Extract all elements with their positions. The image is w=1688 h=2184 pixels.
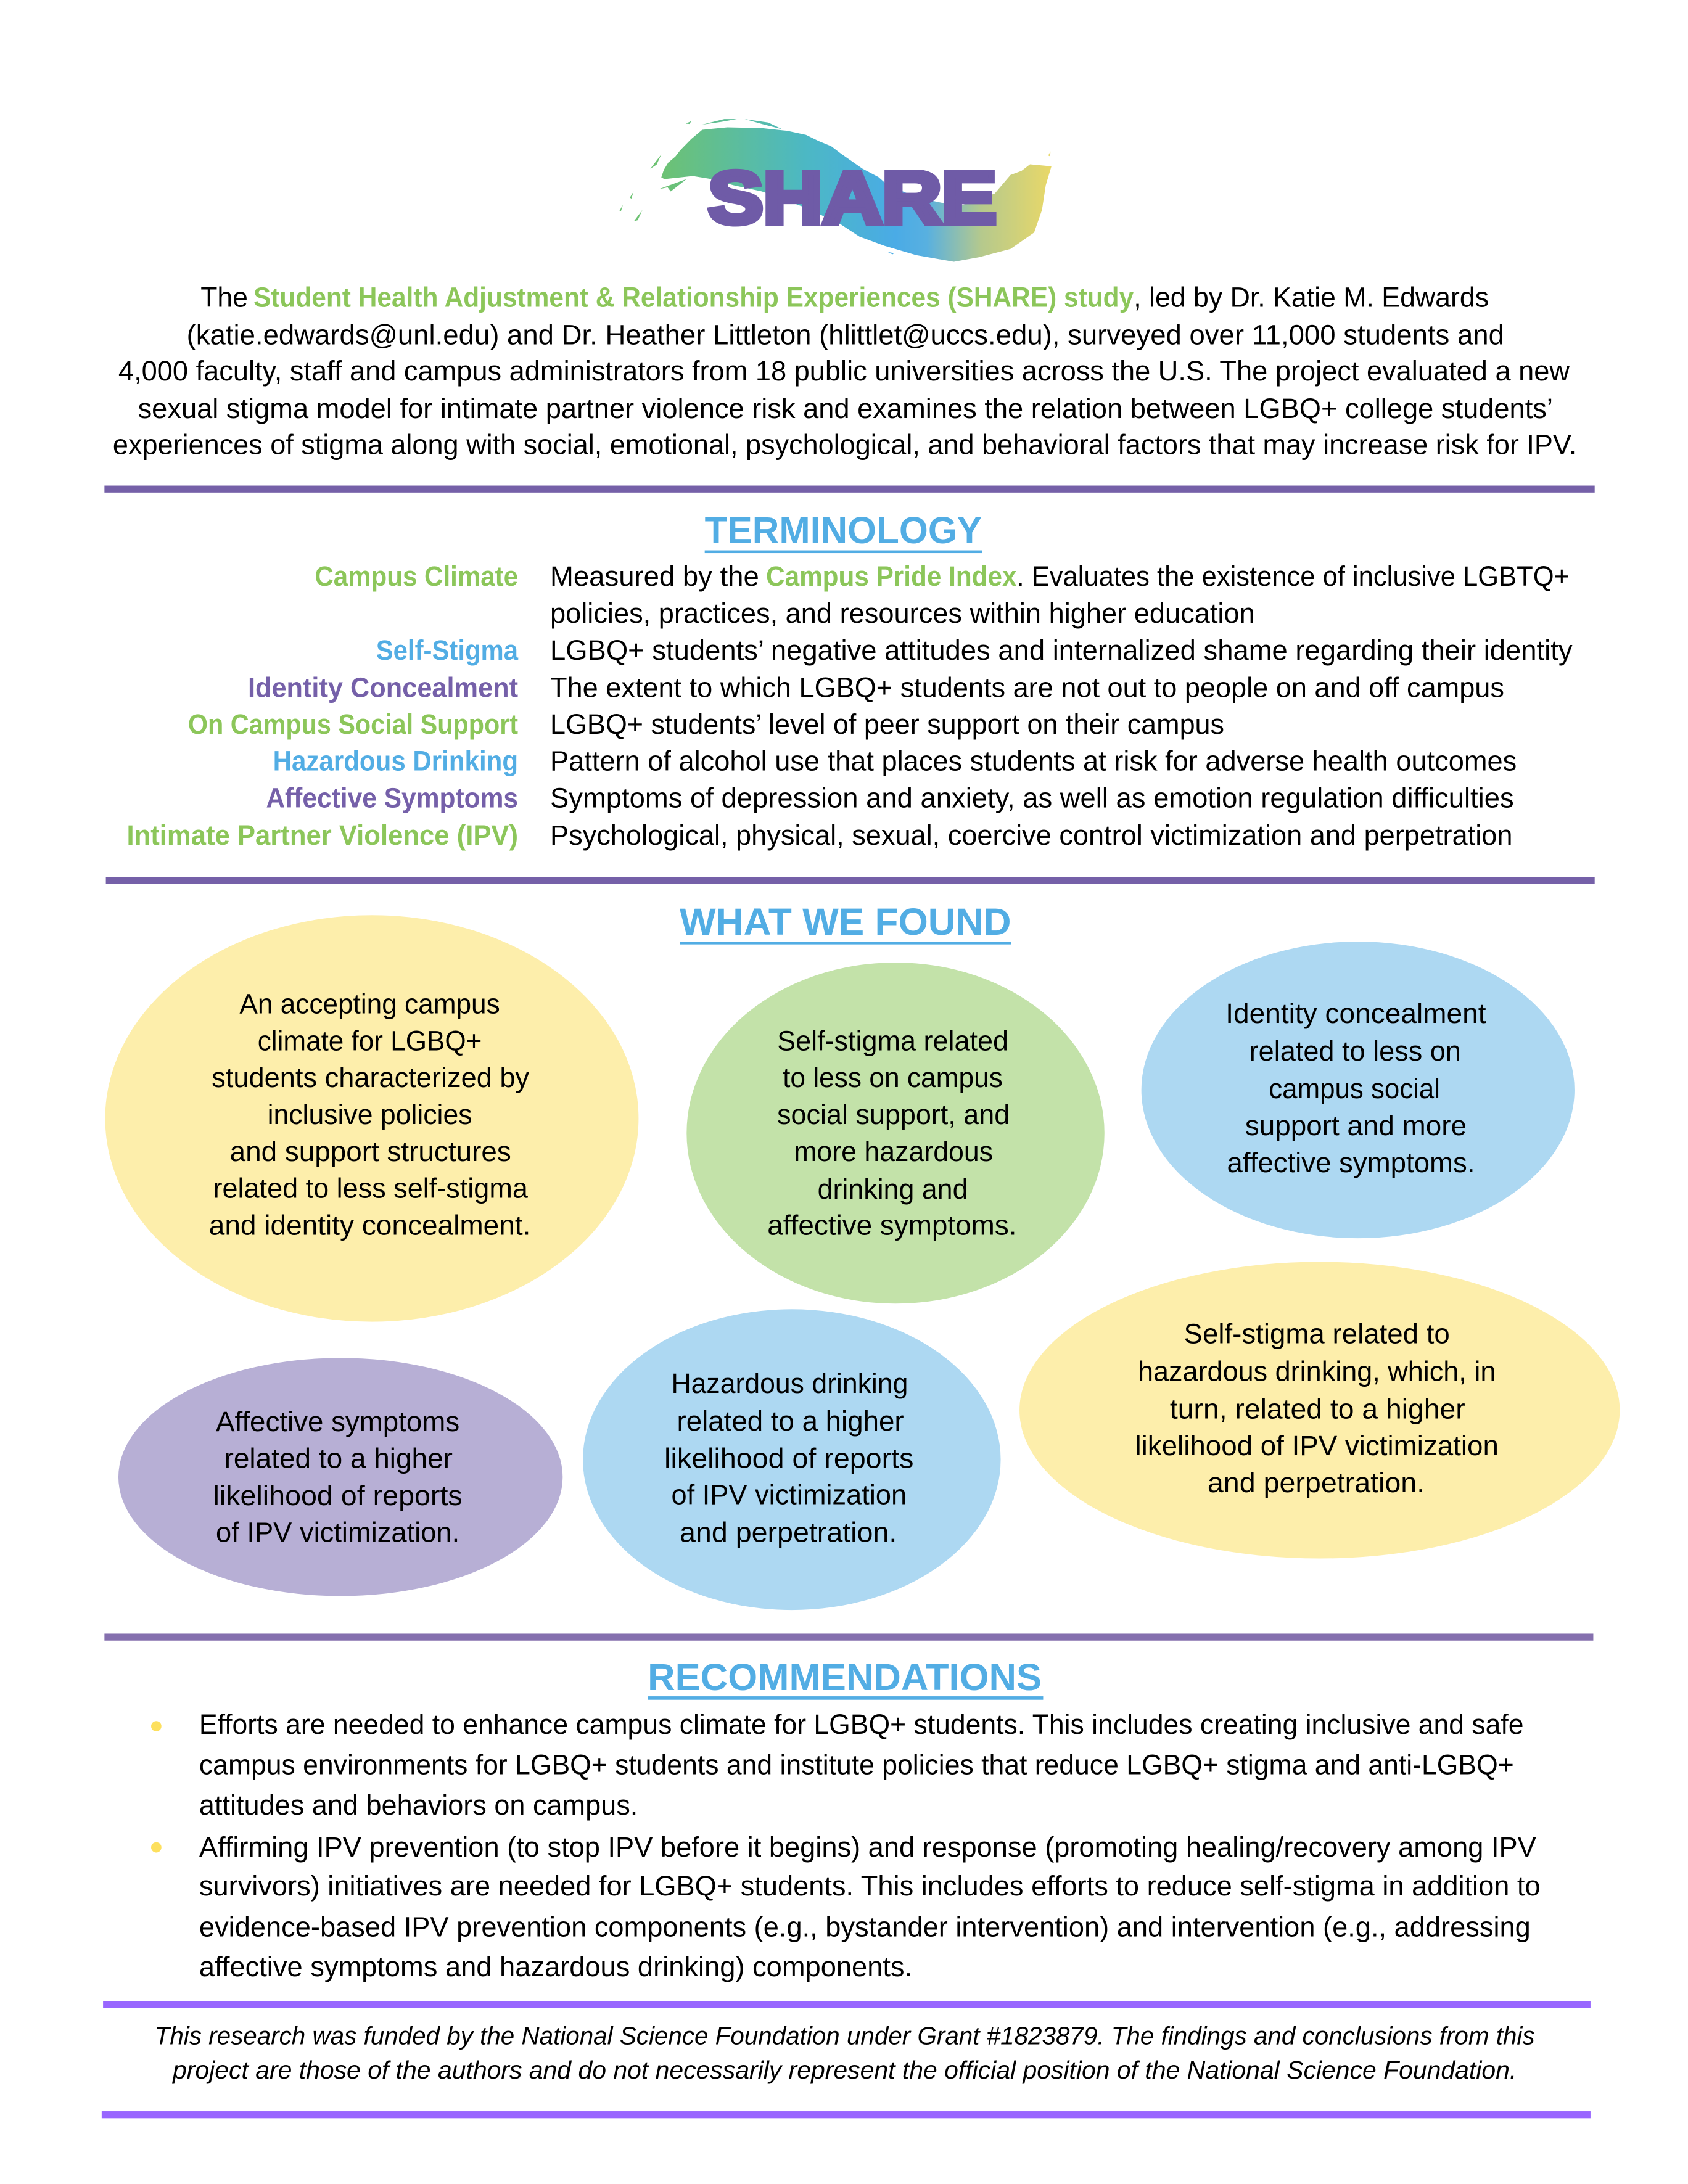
- recommendation 2: Affirming IPV prevention (to stop IPV before it begins) and response (promoting healing/recovery among IPV: [199, 1831, 1536, 1863]
- bubble: self-stigma to IPV finding: likelihood of IPV victimization: [1135, 1430, 1499, 1461]
- intro paragraph: The: [200, 281, 248, 313]
- term: affective symptoms: Symptoms of depression and anxiety, as well as emotion regulation difficulties: [550, 782, 1514, 814]
- intro paragraph: (katie.edwards@unl.edu) and Dr. Heather Littleton (hlittlet@uccs.edu), surveyed over 11,000 students and: [187, 319, 1504, 350]
- heading: terminology: TERMINOLOGY: [705, 509, 982, 551]
- bubble: campus climate finding: [105, 915, 638, 1322]
- intro paragraph: sexual stigma model for intimate partner violence risk and examines the relation between LGBQ+ college students’: [138, 393, 1553, 424]
- intro paragraph: Student Health Adjustment & Relationship Experiences (SHARE) study: [253, 281, 1134, 313]
- heading: recommendations: RECOMMENDATIONS: [648, 1656, 1042, 1698]
- term: affective symptoms: Affective Symptoms: [266, 782, 518, 814]
- funding disclaimer: This research was funded by the National Science Foundation under Grant #1823879. The findings and conclusions from this: [155, 2022, 1535, 2050]
- term: self-stigma: Self-Stigma: [376, 634, 519, 666]
- bubble: self-stigma finding: [686, 963, 1105, 1303]
- bubble: identity concealment finding: related to less on: [1250, 1035, 1461, 1067]
- bubble: identity concealment finding: [1142, 942, 1575, 1238]
- term: campus climate: Campus Climate: [315, 560, 518, 592]
- bubble: affective symptoms finding: [118, 1358, 562, 1596]
- heading: what we found: WHAT WE FOUND: [680, 901, 1011, 943]
- bubble: campus climate finding: students characterized by: [212, 1062, 530, 1093]
- recommendation 2: [151, 1831, 1541, 1982]
- term: on campus social support: LGBQ+ students’ level of peer support on their campus: [550, 708, 1224, 740]
- bubble: affective symptoms finding: related to a higher: [224, 1443, 453, 1474]
- panel: terminology: [127, 509, 1573, 851]
- term: campus climate: Campus Pride Index: [766, 560, 1017, 592]
- bubble: hazardous drinking finding: [583, 1309, 1001, 1610]
- bubble: self-stigma to IPV finding: hazardous drinking, which, in: [1138, 1356, 1496, 1387]
- term: campus climate: . Evaluates the existence of inclusive LGBTQ+: [1017, 560, 1570, 592]
- term: hazardous drinking: Pattern of alcohol use that places students at risk for adverse health outcomes: [550, 745, 1517, 776]
- recommendation 2: evidence-based IPV prevention components (e.g., bystander intervention) and intervention (e.g., addressing: [199, 1911, 1531, 1943]
- term: on campus social support: [188, 708, 1224, 740]
- bubble: hazardous drinking finding: of IPV victimization: [671, 1479, 907, 1510]
- intro paragraph: 4,000 faculty, staff and campus administrators from 18 public universities across the U.S. The project evaluated a new: [118, 355, 1570, 387]
- intro paragraph: experiences of stigma along with social, emotional, psychological, and behavioral factors that may increase risk for IPV.: [113, 429, 1576, 461]
- recommendation 1: campus environments for LGBQ+ students and institute policies that reduce LGBQ+ stigma and anti-LGBQ+: [199, 1749, 1514, 1781]
- funding disclaimer: [155, 2022, 1535, 2084]
- bubble: campus climate finding: An accepting campus: [239, 988, 500, 1019]
- bubble: identity concealment finding: Identity concealment: [1225, 998, 1486, 1029]
- funding disclaimer: project are those of the authors and do not necessarily represent the official position of the National Science Foundation.: [171, 2056, 1517, 2084]
- logo: SHARE brush stroke: SHARE: [708, 157, 997, 239]
- bubble: self-stigma finding: affective symptoms.: [767, 1209, 1017, 1241]
- recommendation 2: survivors) initiatives are needed for LGBQ+ students. This includes efforts to reduce self-stigma in addition to: [199, 1870, 1541, 1902]
- bubble: affective symptoms finding: Affective symptoms: [216, 1406, 459, 1437]
- term: hazardous drinking: Hazardous Drinking: [273, 745, 518, 776]
- bubble: hazardous drinking finding: Hazardous drinking: [671, 1368, 908, 1399]
- bubble: campus climate finding: and identity concealment.: [209, 1209, 530, 1241]
- bubble: self-stigma finding: to less on campus: [783, 1062, 1003, 1093]
- term: self-stigma: LGBQ+ students’ negative attitudes and internalized shame regarding their identity: [550, 634, 1573, 666]
- bubble: identity concealment finding: affective symptoms.: [1227, 1147, 1475, 1178]
- term: intimate partner violence: [127, 819, 1512, 851]
- bubble: self-stigma finding: Self-stigma related: [777, 1025, 1008, 1056]
- bubble: campus climate finding: and support structures: [230, 1136, 511, 1167]
- bubble: hazardous drinking finding: likelihood of reports: [664, 1442, 913, 1474]
- term: intimate partner violence: Intimate Partner Violence (IPV): [127, 819, 518, 851]
- panel: recommendations: [151, 1656, 1541, 1982]
- bubble: campus climate finding: inclusive policies: [268, 1099, 472, 1130]
- recommendation 1: attitudes and behaviors on campus.: [199, 1789, 638, 1821]
- recommendation 1: [151, 1709, 1524, 1821]
- logo: SHARE brush stroke: [619, 119, 1052, 261]
- term: identity concealment: Identity Concealment: [248, 671, 518, 703]
- bubble: self-stigma to IPV finding: turn, related to a higher: [1170, 1394, 1465, 1425]
- bubble: self-stigma finding: more hazardous: [794, 1136, 993, 1167]
- bubble: self-stigma finding: drinking and: [818, 1173, 968, 1205]
- bubble: hazardous drinking finding: related to a higher: [677, 1405, 904, 1437]
- recommendation 2: affective symptoms and hazardous drinking) components.: [199, 1951, 912, 1982]
- intro paragraph: , led by Dr. Katie M. Edwards: [1134, 281, 1489, 313]
- term: identity concealment: The extent to which LGBQ+ students are not out to people on and off campus: [550, 671, 1504, 703]
- bubble: identity concealment finding: support and more: [1245, 1110, 1467, 1141]
- term: campus climate: policies, practices, and resources within higher education: [550, 597, 1255, 629]
- bubble: self-stigma to IPV finding: and perpetration.: [1208, 1467, 1425, 1498]
- intro paragraph: [113, 281, 1576, 461]
- recommendation 1: Efforts are needed to enhance campus climate for LGBQ+ students. This includes creating inclusive and safe: [199, 1709, 1524, 1740]
- bubble: self-stigma finding: social support, and: [777, 1099, 1010, 1130]
- bubble: campus climate finding: related to less self-stigma: [213, 1173, 529, 1204]
- bubble: hazardous drinking finding: and perpetration.: [680, 1516, 897, 1548]
- bubble: affective symptoms finding: of IPV victimization.: [216, 1516, 459, 1548]
- term: on campus social support: On Campus Social Support: [188, 708, 518, 740]
- panel: what we found: [105, 901, 1620, 1610]
- bubble: affective symptoms finding: likelihood of reports: [213, 1480, 463, 1511]
- bubble: self-stigma to IPV finding: Self-stigma related to: [1184, 1318, 1450, 1350]
- bubble: self-stigma to IPV finding: [1019, 1262, 1620, 1559]
- term: campus climate: [315, 560, 1570, 629]
- term: campus climate: Measured by the: [550, 560, 759, 592]
- bubble: identity concealment finding: campus social: [1269, 1073, 1440, 1104]
- term: intimate partner violence: Psychological, physical, sexual, coercive control victimization and perpetration: [550, 819, 1512, 851]
- bubble: campus climate finding: climate for LGBQ+: [258, 1025, 482, 1056]
